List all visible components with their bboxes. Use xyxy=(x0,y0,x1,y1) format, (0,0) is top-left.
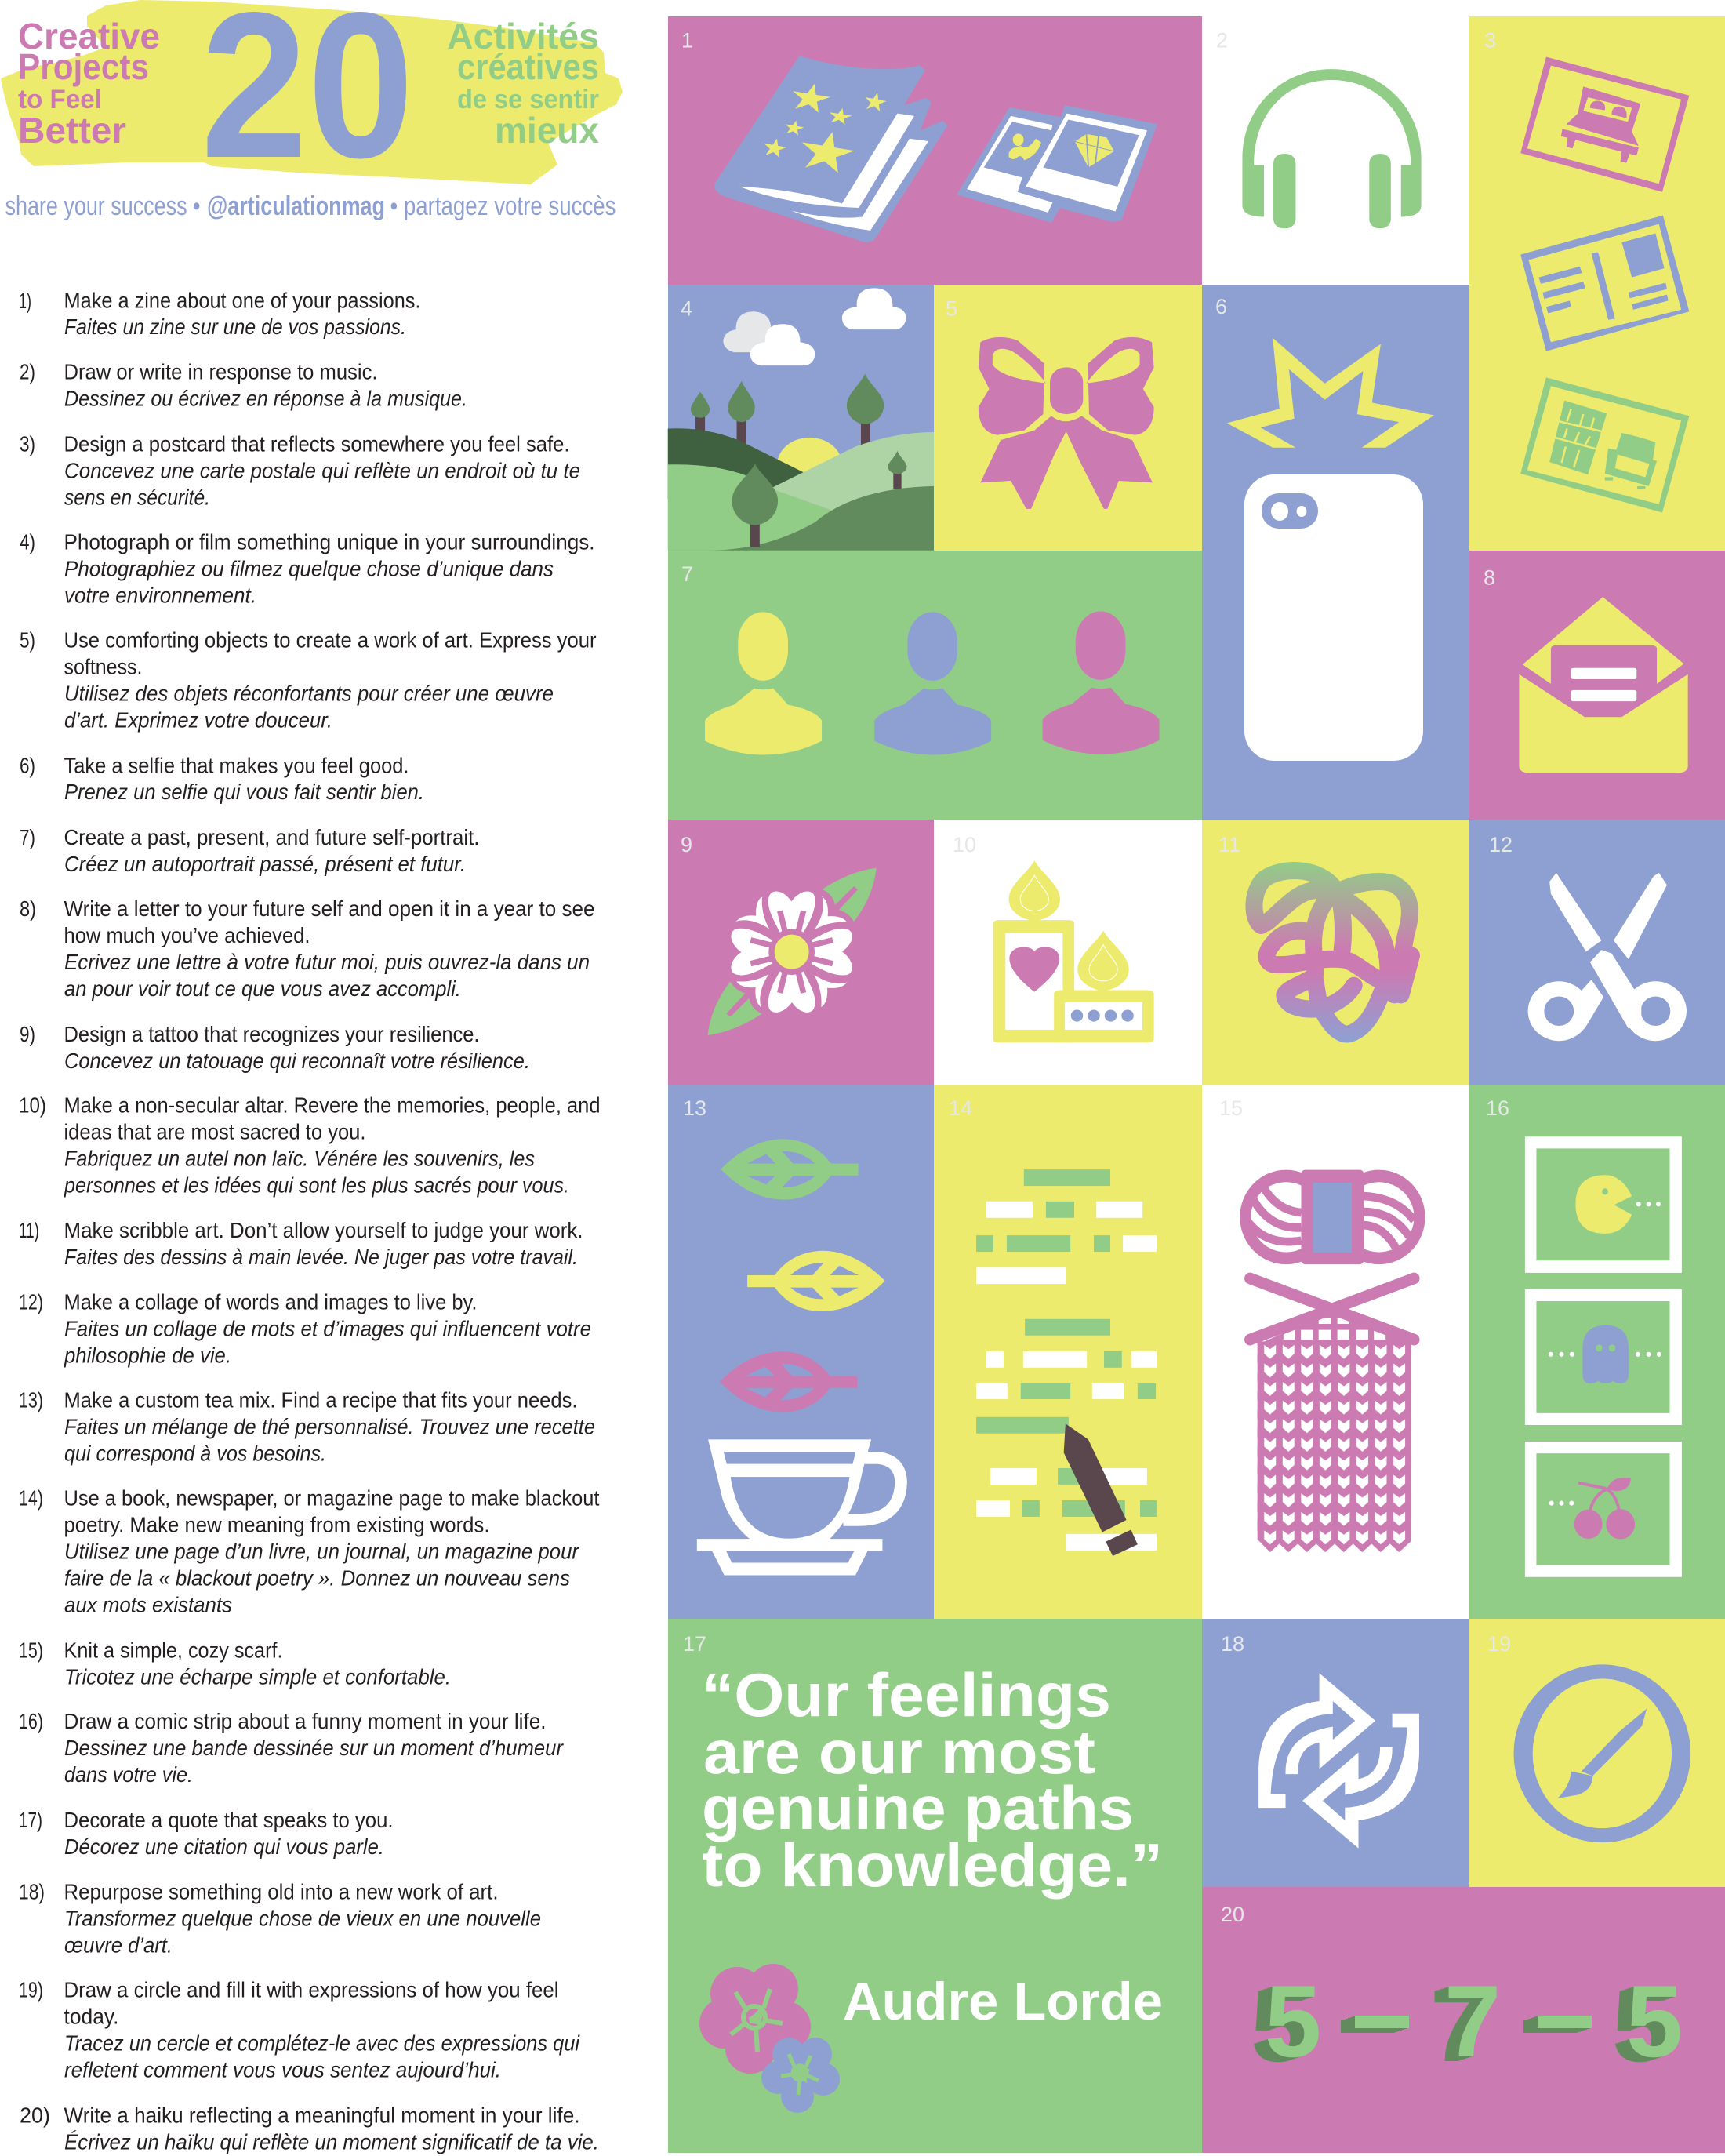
comic frame 2: ghost xyxy=(1525,1289,1682,1425)
item 16: Dessinez une bande dessinée sur un moment d’humeur xyxy=(64,1736,565,1760)
icon: knitted scarf on needles xyxy=(1250,1278,1414,1552)
comic frame 3: cherries xyxy=(1525,1442,1682,1577)
item 10 xyxy=(19,1093,601,1197)
quote text: to knowledge.” xyxy=(702,1831,1163,1900)
item 10: 10) xyxy=(19,1093,46,1117)
item 17: Decorate a quote that speaks to you. xyxy=(64,1808,394,1832)
item 19 xyxy=(19,1978,580,2082)
item 20: Écrivez un haïku qui reflète un moment significatif de ta vie. xyxy=(64,2129,599,2154)
item 10: Fabriquez un autel non laïc. Vénére les souvenirs, les xyxy=(64,1147,535,1170)
item 12: 12) xyxy=(19,1290,43,1314)
item 8: 8) xyxy=(20,896,36,921)
item 17 xyxy=(19,1808,394,1859)
share line: • partagez votre succès xyxy=(390,191,616,221)
item 4: 4) xyxy=(20,530,35,554)
panel 11: scribble xyxy=(1202,820,1469,1085)
quote text: are our most xyxy=(703,1718,1095,1787)
share line: share your success • xyxy=(5,191,201,221)
item 10: personnes et les idées qui sont les plus sacrés pour vous. xyxy=(64,1173,569,1197)
item 18: œuvre d’art. xyxy=(64,1933,172,1958)
icon: phone xyxy=(1244,474,1423,761)
item 5: Utilisez des objets réconfortants pour créer une œuvre xyxy=(64,682,554,706)
item 14: aux mots existants xyxy=(64,1593,232,1617)
item 16 xyxy=(19,1709,565,1787)
quote text: “Our feelings xyxy=(702,1660,1111,1729)
item 14: poetry. Make new meaning from existing words. xyxy=(64,1513,489,1537)
icon: flower xyxy=(731,891,852,1013)
icon: postcard with bed xyxy=(1520,57,1689,192)
panel 12: scissors: 12 xyxy=(1489,833,1513,856)
icon: scissors xyxy=(1528,873,1687,1041)
title: french: créatives xyxy=(457,46,599,87)
item 5: softness. xyxy=(64,655,143,679)
item 14 xyxy=(19,1486,600,1617)
item 18: Transformez quelque chose de vieux en une nouvelle xyxy=(64,1907,541,1931)
panel 15: knitting: 15 xyxy=(1219,1096,1243,1120)
panel 2: headphones xyxy=(1202,16,1469,285)
clouds xyxy=(723,288,906,365)
panel 8: envelope: 8 xyxy=(1484,566,1495,590)
item 15: Knit a simple, cozy scarf. xyxy=(64,1638,282,1663)
panel 3: postcards xyxy=(1469,16,1725,551)
item 9: Design a tattoo that recognizes your resilience. xyxy=(64,1022,480,1046)
bust blue xyxy=(874,612,991,754)
item 7 xyxy=(20,825,480,876)
item 12 xyxy=(19,1290,591,1368)
panel 9: tattoo flower xyxy=(668,820,934,1085)
item 8: Ecrivez une lettre à votre futur moi, puis ouvrez-la dans un xyxy=(64,950,590,974)
haiku syllables 5-7-5: 5 xyxy=(1626,1964,1683,2078)
item 5: d’art. Exprimez votre douceur. xyxy=(64,708,332,733)
comic frame 1: pacman xyxy=(1525,1136,1682,1273)
item 4 xyxy=(20,530,594,608)
panel 13: tea: 13 xyxy=(683,1096,706,1120)
title: french: Activités xyxy=(447,16,599,56)
panel 19: circle and brush: 19 xyxy=(1487,1632,1511,1656)
item 9: 9) xyxy=(20,1022,35,1046)
panel 7: self portraits: 7 xyxy=(681,562,693,586)
blackout bars xyxy=(976,1169,1157,1551)
panel 16: comic strip xyxy=(1469,1085,1725,1619)
item 15 xyxy=(19,1638,451,1689)
item 9 xyxy=(20,1022,530,1073)
panel 7: self portraits xyxy=(668,551,1202,820)
icon: bow xyxy=(979,337,1154,509)
item 16: 16) xyxy=(19,1709,43,1733)
item 18: Repurpose something old into a new work of art. xyxy=(64,1880,499,1904)
panel 4: landscape: 4 xyxy=(681,297,692,321)
icon: yarn ball xyxy=(1240,1170,1425,1264)
item 14: Utilisez une page d’un livre, un journal, un magazine pour xyxy=(64,1540,580,1564)
icon: green leaf xyxy=(721,1139,859,1200)
panel 10: altar candles: 10 xyxy=(953,833,976,856)
item 15: Tricotez une écharpe simple et confortable. xyxy=(64,1665,451,1689)
item 2: Draw or write in response to music. xyxy=(64,359,378,384)
share line xyxy=(5,191,616,221)
haiku syllables 5-7-5: 5 xyxy=(1265,1964,1321,2078)
quote text xyxy=(702,1660,1163,1900)
panel 14: blackout poetry xyxy=(934,1085,1202,1619)
item 3: Concevez une carte postale qui reflète un endroit où tu te xyxy=(64,459,580,483)
item 12: Make a collage of words and images to live by. xyxy=(64,1290,477,1314)
icon: postcard with living room xyxy=(1520,377,1689,512)
item 8: how much you’ve achieved. xyxy=(64,923,310,947)
item 13: Make a custom tea mix. Find a recipe that fits your needs. xyxy=(64,1388,577,1412)
item 13: qui correspond à vos besoins. xyxy=(64,1442,326,1466)
item 19: refletent comment vous vous sentez aujourd’hui. xyxy=(64,2058,501,2082)
activity list xyxy=(19,289,601,2154)
item 6 xyxy=(20,753,424,804)
item 18: 18) xyxy=(19,1880,45,1904)
item 8: an pour voir tout ce que vous avez accompli. xyxy=(64,976,461,1001)
title: french: de se sentir xyxy=(457,85,599,115)
item 20: Write a haiku reflecting a meaningful moment in your life. xyxy=(64,2103,580,2127)
haiku syllables 5-7-5: 7 xyxy=(1444,1964,1501,2078)
item 1: Make a zine about one of your passions. xyxy=(64,289,420,313)
item 1 xyxy=(19,289,420,339)
item 3 xyxy=(20,432,580,510)
panel 6: selfie phone: 6 xyxy=(1215,295,1227,318)
item 17: Décorez une citation qui vous parle. xyxy=(64,1834,384,1859)
item 19: Draw a circle and fill it with expressions of how you feel xyxy=(64,1978,558,2002)
panel 12: scissors xyxy=(1469,820,1725,1085)
panel 18: repurpose arrows: 18 xyxy=(1221,1632,1244,1656)
item 14: Use a book, newspaper, or magazine page to make blackout xyxy=(64,1486,600,1511)
item 6: Take a selfie that makes you feel good. xyxy=(64,753,409,778)
item 11: Make scribble art. Don’t allow yourself to judge your work. xyxy=(64,1218,583,1242)
item 12: Faites un collage de mots et d’images qui influencent votre xyxy=(64,1317,591,1341)
icon: scribble xyxy=(1254,871,1411,1034)
item 18 xyxy=(19,1880,541,1958)
icon: yellow leaf xyxy=(747,1251,885,1311)
yellow brush stroke xyxy=(1,0,623,184)
panel 2: headphones: 2 xyxy=(1216,29,1228,53)
panel 4: landscape xyxy=(668,285,934,551)
item 5: Use comforting objects to create a work of art. Express your xyxy=(64,628,596,653)
illustration: hills, trees and clouds xyxy=(668,288,934,551)
panel 13: tea xyxy=(668,1085,934,1619)
panel 19: circle and brush xyxy=(1469,1619,1725,1887)
item 4: Photographiez ou filmez quelque chose d’unique dans xyxy=(64,557,554,581)
icon: recycling arrows xyxy=(1258,1673,1419,1849)
panel 20: haiku background: 20 xyxy=(1221,1903,1244,1926)
item 1: Faites un zine sur une de vos passions. xyxy=(64,314,406,339)
bust yellow xyxy=(705,612,822,754)
icon: candles xyxy=(993,860,1154,1042)
icon: headphones xyxy=(1242,69,1422,228)
panel 3: postcards: 3 xyxy=(1484,29,1496,53)
item 19: today. xyxy=(64,2005,119,2029)
item 3: sens en sécurité. xyxy=(64,485,210,510)
title: french: mieux xyxy=(495,110,599,151)
panel 1: zine and photos: 1 xyxy=(681,29,693,53)
panel 15: knitting xyxy=(1202,1085,1469,1619)
item 19: 19) xyxy=(19,1978,43,2002)
icon: circle with brush xyxy=(1514,1664,1690,1842)
title: english xyxy=(18,16,160,151)
panel 11: scribble: 11 xyxy=(1218,833,1240,856)
panel 14: blackout poetry: 14 xyxy=(949,1096,972,1120)
item 8 xyxy=(20,896,594,1001)
item 5: 5) xyxy=(20,628,35,653)
icon: blue flower xyxy=(761,2038,840,2113)
panel 10: altar candles xyxy=(934,820,1202,1085)
item 7: Create a past, present, and future self-portrait. xyxy=(64,825,480,849)
item 8: Write a letter to your future self and open it in a year to see xyxy=(64,896,594,921)
panel 9: tattoo flower: 9 xyxy=(681,833,692,856)
item 4: votre environnement. xyxy=(64,584,256,608)
icon: pink leaf xyxy=(720,1351,857,1412)
item 14: faire de la « blackout poetry ». Donnez un nouveau sens xyxy=(64,1566,570,1591)
item 15: 15) xyxy=(19,1638,43,1663)
icon: zine book xyxy=(714,56,947,242)
panel 16: comic strip: 16 xyxy=(1486,1096,1509,1120)
item 14: 14) xyxy=(19,1486,43,1511)
item 7: 7) xyxy=(20,825,35,849)
item 10: ideas that are most sacred to you. xyxy=(64,1120,365,1143)
icon: postcard blank xyxy=(1520,216,1689,351)
item 4: Photograph or film something unique in your surroundings. xyxy=(64,530,594,554)
panel 6: selfie phone xyxy=(1202,285,1469,820)
item 17: 17) xyxy=(19,1808,42,1832)
title: english: Projects xyxy=(18,46,149,87)
icon: polaroid photos xyxy=(957,105,1157,223)
icon: teacup xyxy=(697,1439,901,1576)
item 9: Concevez un tatouage qui reconnaît votre résilience. xyxy=(64,1049,530,1073)
item 11: 11) xyxy=(19,1218,39,1242)
haiku syllables 5-7-5 xyxy=(1254,1964,1683,2078)
item 13 xyxy=(19,1388,595,1466)
title: english: Better xyxy=(18,110,126,151)
panel 17: quote: 17 xyxy=(683,1632,706,1656)
header: title block xyxy=(1,0,623,202)
item 20: 20) xyxy=(20,2103,50,2127)
item 16: Draw a comic strip about a funny moment in your life. xyxy=(64,1709,546,1733)
icon: flash burst xyxy=(1227,338,1434,448)
icon: envelope xyxy=(1519,597,1688,773)
icon: pink flower xyxy=(699,1964,811,2074)
item 3: Design a postcard that reflects somewhere you feel safe. xyxy=(64,432,569,456)
bust pink xyxy=(1043,611,1160,754)
item 13: Faites un mélange de thé personnalisé. Trouvez une recette xyxy=(64,1415,595,1439)
item 13: 13) xyxy=(19,1388,43,1412)
item 7: Créez un autoportrait passé, présent et futur. xyxy=(64,852,466,876)
item 2 xyxy=(20,359,467,411)
icons: three busts xyxy=(705,611,1160,754)
item 5 xyxy=(20,628,596,733)
item 10: Make a non-secular altar. Revere the memories, people, and xyxy=(64,1093,601,1117)
icon: leaves xyxy=(708,868,877,1035)
share line: @articulationmag xyxy=(207,191,385,221)
item 16: dans votre vie. xyxy=(64,1762,193,1787)
item 1: 1) xyxy=(19,289,31,313)
item 6: 6) xyxy=(20,753,35,778)
title: english: to Feel xyxy=(18,85,102,115)
item 11 xyxy=(19,1218,583,1269)
item 2: Dessinez ou écrivez en réponse à la musique. xyxy=(64,386,467,411)
title: french xyxy=(447,16,599,151)
item 11: Faites des dessins à main levée. Ne juger pas votre travail. xyxy=(64,1245,578,1269)
attribution: Audre Lorde xyxy=(843,1972,1163,2031)
icon: marker xyxy=(1064,1423,1138,1556)
panel 20: haiku background xyxy=(1202,1887,1725,2153)
panel 5: bow xyxy=(934,285,1202,551)
item 19: Tracez un cercle et complétez-le avec des expressions qui xyxy=(64,2031,580,2056)
item 6: Prenez un selfie qui vous fait sentir bien. xyxy=(64,780,424,804)
panel 5: bow: 5 xyxy=(946,297,957,321)
item 3: 3) xyxy=(20,432,35,456)
panel 8: envelope xyxy=(1469,551,1725,820)
item 20 xyxy=(20,2103,599,2154)
panel 17: quote xyxy=(668,1619,1202,2153)
panel 18: repurpose arrows xyxy=(1202,1619,1469,1887)
item 12: philosophie de vie. xyxy=(64,1343,231,1368)
quote text: genuine paths xyxy=(702,1773,1134,1842)
title: english: Creative xyxy=(18,16,160,56)
panel 1: zine and photos xyxy=(668,16,1202,285)
item 2: 2) xyxy=(20,359,35,384)
